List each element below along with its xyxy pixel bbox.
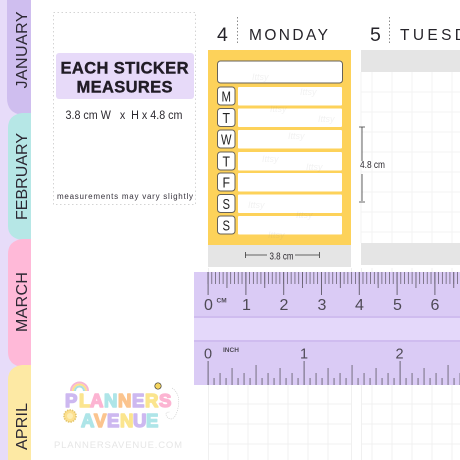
logo word: Planners: N — [104, 390, 117, 411]
text: website: PLANNERSAVENUE.COM — [54, 440, 182, 451]
inch numbers: 0 — [204, 346, 212, 362]
logo word: Planners — [65, 390, 171, 411]
logo word: Avenue: V — [94, 410, 107, 431]
row: F: F — [222, 176, 230, 192]
centimetre numbers: 5 — [393, 297, 402, 314]
row: M: M — [222, 90, 231, 106]
sticker header box — [218, 61, 342, 83]
logo: Planners Avenue — [64, 382, 179, 431]
watermark text: Ittsy — [270, 104, 287, 114]
height arrow: 4.8 cm: 4.8 cm — [360, 160, 385, 171]
label: INCH: INCH — [223, 347, 239, 354]
watermark text: Ittsy — [296, 210, 313, 220]
logo word: Avenue: A — [81, 410, 94, 431]
row: S — [218, 216, 342, 234]
centimetre numbers: 2 — [280, 297, 289, 314]
centimetre numbers: 1 — [242, 297, 251, 314]
logo word: Planners: N — [118, 390, 131, 411]
logo word: Planners: R — [145, 390, 158, 411]
heading: 4 Monday — [217, 17, 328, 46]
grid: lower planner cells — [208, 268, 460, 460]
inch numbers — [204, 346, 404, 362]
watermark text: Ittsy — [318, 114, 335, 124]
heading: 5 Tuesday: 5 — [370, 24, 381, 46]
tab: April: APRIL — [14, 403, 31, 450]
text: measurements note: measurements may vary slightly — [57, 192, 193, 201]
tab: January: JANUARY — [14, 11, 31, 88]
logo word: Planners: L — [79, 390, 90, 411]
row: F — [218, 173, 342, 192]
heading: 4 Monday: 4 — [217, 24, 228, 46]
sidebar strip — [0, 0, 31, 460]
logo word: Avenue: N — [120, 410, 133, 431]
width arrow: 3.8 cm — [246, 252, 320, 262]
tab: February: FEBRUARY — [14, 133, 31, 220]
watermark text: Ittsy — [248, 200, 265, 210]
gray band below sticker — [208, 245, 351, 267]
inch ticks — [208, 373, 460, 382]
centimetre numbers: 6 — [431, 297, 440, 314]
logo word: Planners: P — [65, 390, 77, 411]
watermark text: Ittsy — [252, 72, 269, 82]
row: T: T — [222, 111, 230, 127]
watermark text: Ittsy — [268, 230, 285, 240]
row: S: S — [222, 218, 230, 234]
tab: January — [7, 0, 31, 115]
tab: March: MARCH — [14, 272, 31, 332]
row: S — [218, 194, 342, 213]
tab: March — [8, 239, 31, 367]
row: W: W — [221, 132, 232, 148]
watermark text — [248, 72, 335, 240]
panel: sticker measurements — [54, 12, 196, 204]
icon: sun — [64, 410, 76, 422]
row: M — [218, 87, 342, 106]
tab: April — [8, 365, 31, 460]
watermark text: Ittsy — [300, 87, 317, 97]
row: T — [218, 108, 342, 127]
centimetre numbers: 3 — [318, 297, 327, 314]
logo word: Avenue — [81, 410, 158, 431]
heading: 4 Monday: MONDAY — [249, 27, 328, 44]
label: CM: CM — [216, 298, 227, 304]
sticker: weekly layout — [208, 50, 351, 245]
logo word: Avenue: U — [133, 410, 146, 431]
logo word: Avenue: E — [146, 410, 158, 431]
centimetre numbers: 4 — [355, 297, 364, 314]
watermark text: Ittsy — [288, 131, 305, 141]
heading: 5 Tuesday — [370, 17, 460, 46]
heading: each sticker measures: MEASURES — [76, 78, 172, 96]
width arrow: 3.8 cm: 3.8 cm — [270, 252, 294, 262]
icon: rainbow — [71, 382, 88, 391]
height arrow: 4.8 cm — [359, 127, 385, 202]
icon: bee — [155, 383, 179, 419]
centimetre numbers: 0 — [204, 297, 213, 314]
row: S: S — [222, 197, 230, 213]
centimetre numbers — [204, 297, 440, 314]
logo word: Avenue: E — [107, 410, 119, 431]
tab: February — [8, 113, 31, 240]
logo word: Planners: S — [159, 390, 171, 411]
ruler — [194, 272, 460, 385]
grid: Tuesday column — [361, 50, 460, 265]
logo word: Planners: A — [90, 390, 103, 411]
row: W — [218, 130, 342, 148]
inch numbers: 2 — [395, 346, 404, 362]
watermark text: Ittsy — [306, 162, 323, 172]
watermark text: Ittsy — [262, 154, 279, 164]
centimetre ticks — [208, 278, 460, 284]
logo word: Planners: E — [132, 390, 144, 411]
heading: each sticker measures: EACH STICKER — [60, 60, 189, 78]
heading: each sticker measures — [56, 53, 194, 99]
row: T: T — [222, 154, 230, 170]
text: dimensions: 3.8 cm W x H x 4.8 cm — [66, 110, 182, 122]
inch numbers: 1 — [300, 346, 308, 362]
row: T — [218, 152, 342, 170]
